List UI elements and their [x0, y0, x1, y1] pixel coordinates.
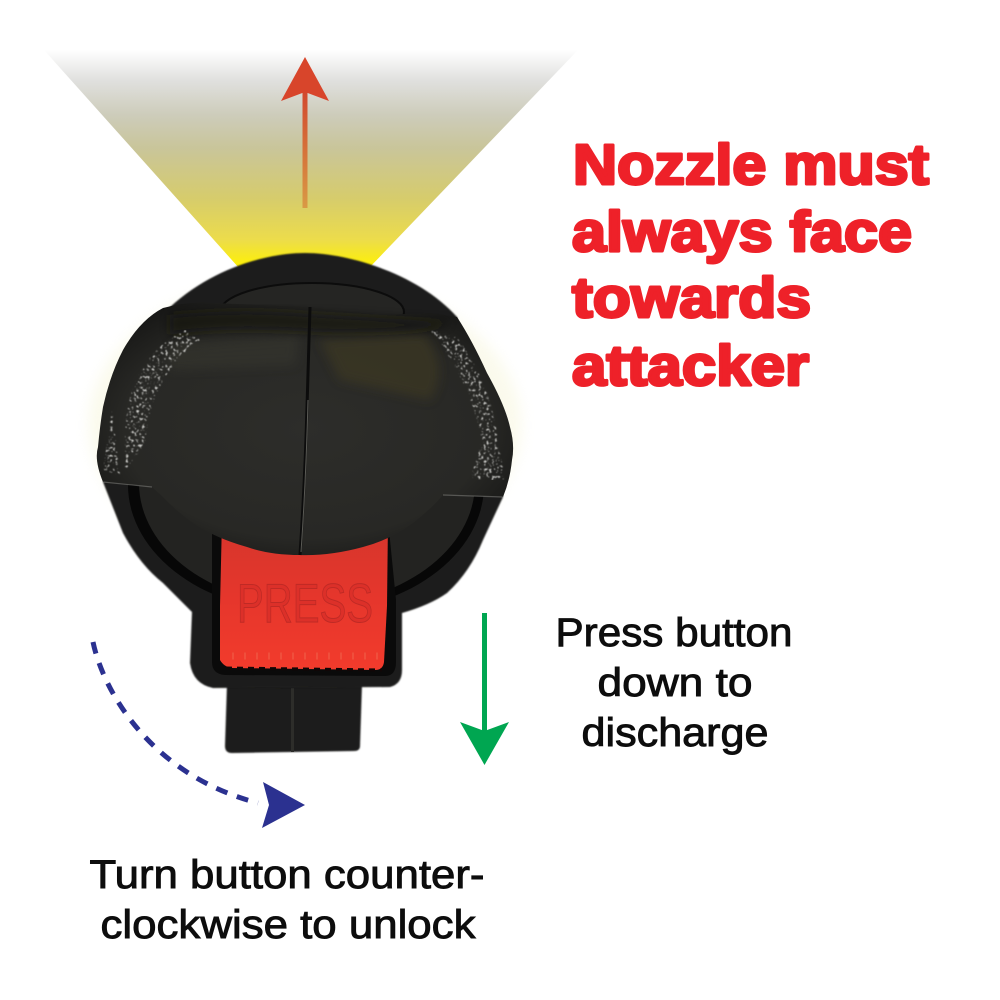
heading: Nozzle must: [573, 133, 929, 197]
cover speckle right: [430, 330, 505, 480]
ring gap: [128, 357, 484, 613]
text: press button: Press button: [556, 611, 792, 655]
icon: spray device: [89, 253, 521, 753]
glow: [89, 275, 521, 575]
outer ring: [103, 253, 503, 688]
button surround: [212, 520, 396, 676]
text: turn button: clockwise to unlock: [100, 903, 477, 947]
cover speckle left: [103, 330, 200, 475]
inner disc: [139, 361, 475, 605]
arrow: nozzle direction: [281, 57, 329, 208]
text: press button: down to: [598, 661, 752, 705]
red press button: [220, 520, 388, 670]
lower collar: [225, 684, 362, 753]
cover shading: [320, 335, 439, 400]
arrow: press down: [460, 613, 509, 765]
heading: always face: [572, 200, 912, 264]
text: press button: discharge: [582, 711, 768, 755]
cover lower lip: [103, 482, 503, 497]
text: press button: [556, 611, 792, 755]
heading: attacker: [572, 334, 809, 398]
text: turn button: [90, 853, 484, 947]
cover seam: [300, 307, 310, 555]
heading: towards: [572, 266, 811, 330]
arrow: turn counter-clockwise: [93, 642, 305, 828]
heading: [572, 133, 929, 398]
spray cone: [44, 50, 578, 268]
red press button: PRESS: [237, 572, 373, 634]
nozzle disc: [220, 283, 404, 341]
main cover: [97, 303, 513, 555]
text: turn button: Turn button counter-: [90, 853, 484, 897]
